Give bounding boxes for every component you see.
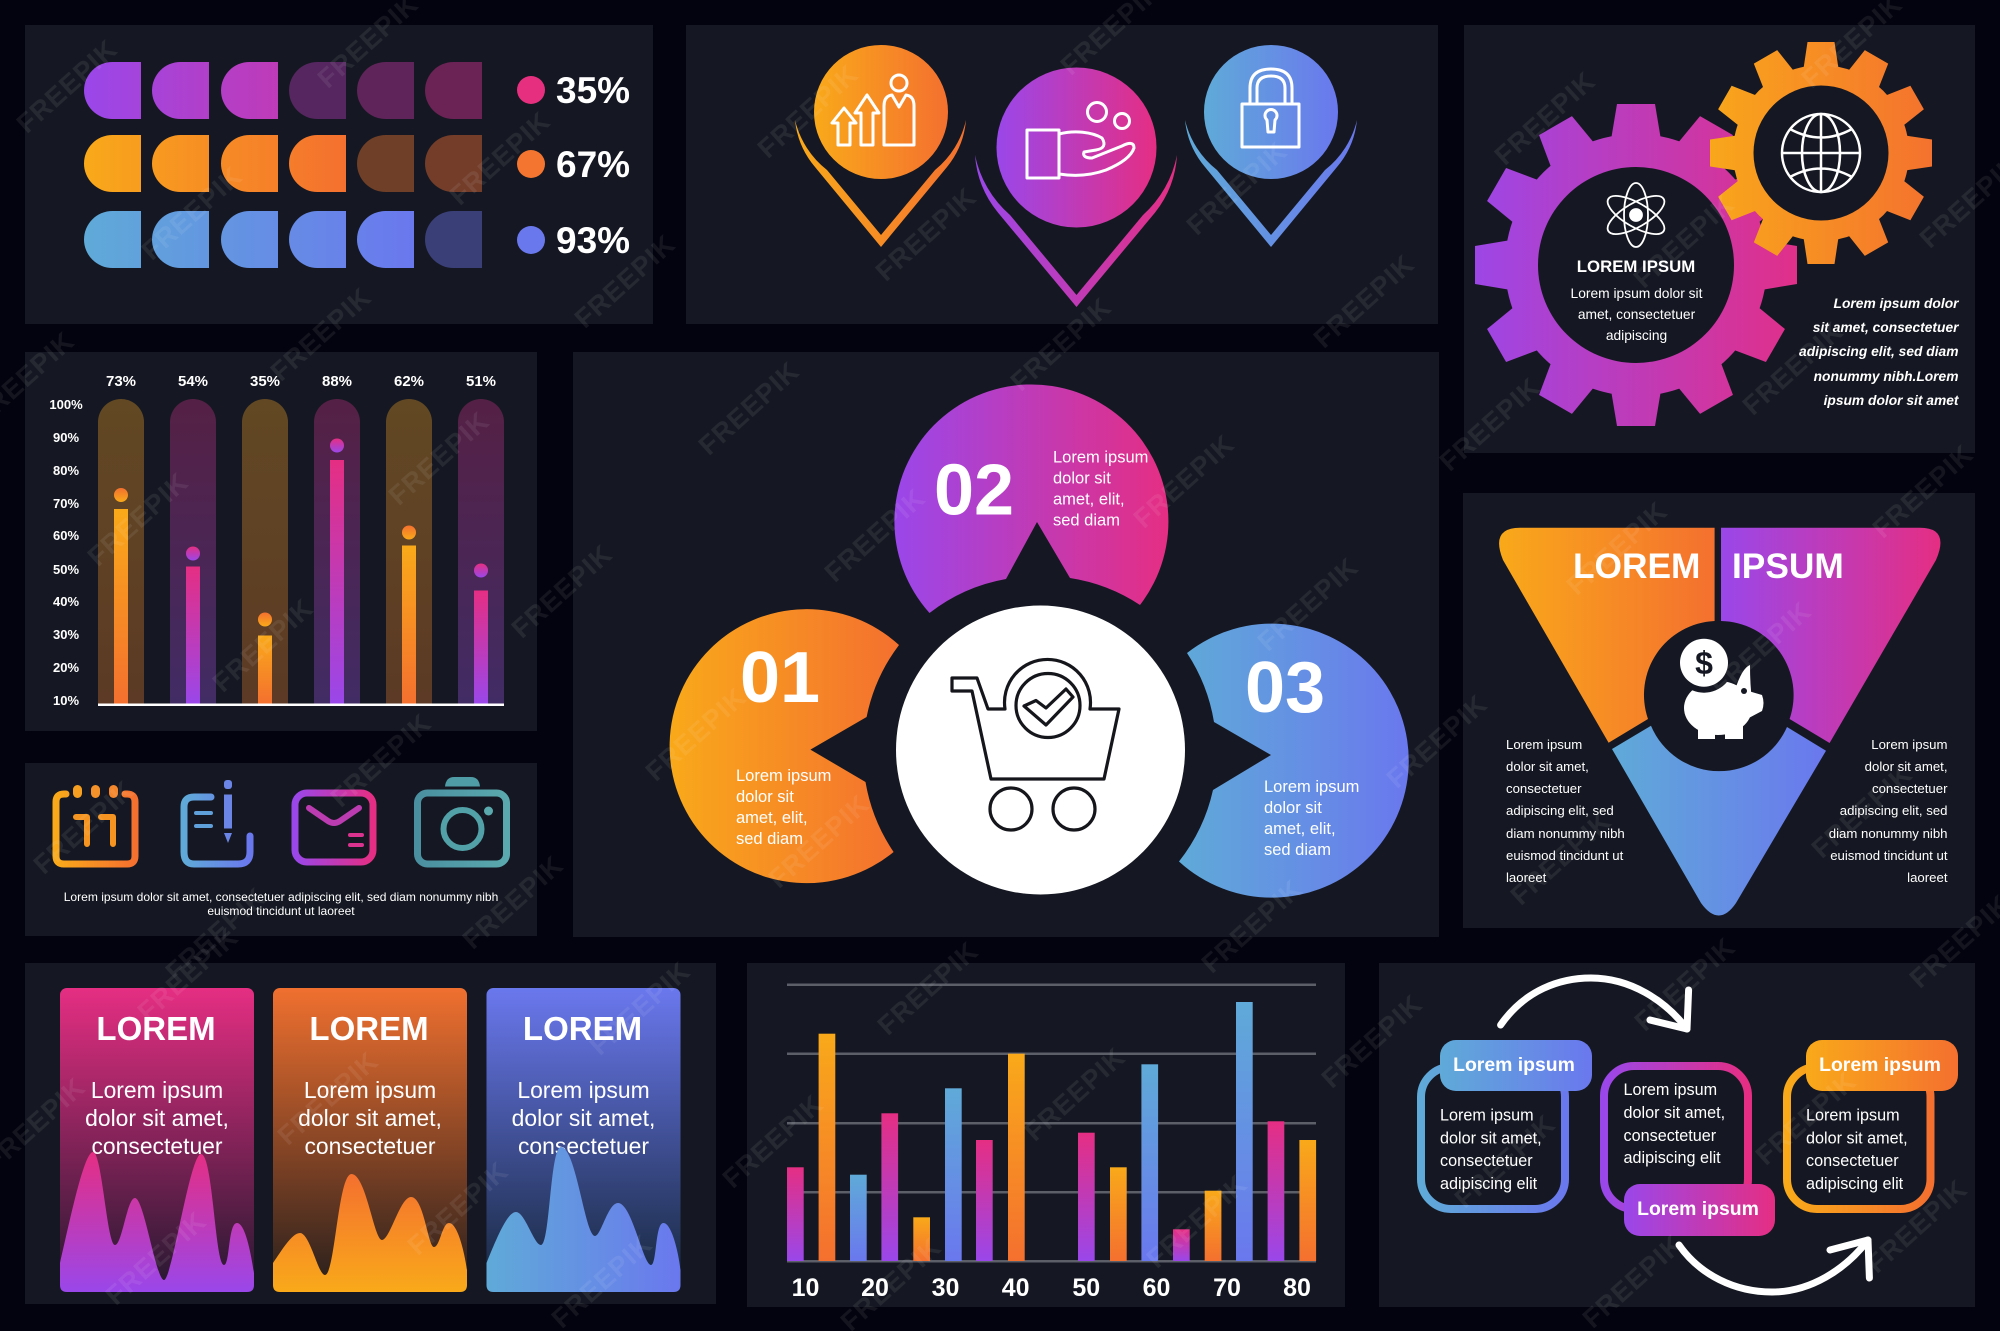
panel: location pins bbox=[686, 25, 1438, 324]
legend: percentages: 67% bbox=[556, 144, 630, 185]
text block: gear side note: ipsum dolor sit amet bbox=[1824, 393, 1960, 408]
text block: funnel right: adipiscing elit, sed bbox=[1840, 803, 1948, 818]
segment 01: 01 bbox=[740, 638, 820, 718]
watermarks: FREEPIK bbox=[265, 282, 377, 387]
panel: shopping cycle bbox=[573, 352, 1439, 937]
y axis labels: 20% bbox=[53, 660, 79, 675]
x axis labels: 20 bbox=[861, 1274, 889, 1302]
x axis labels: 80 bbox=[1283, 1274, 1311, 1302]
y axis labels: 10% bbox=[53, 693, 79, 708]
row of purple half-round shapes bbox=[84, 62, 482, 119]
segment 02: 02 bbox=[934, 450, 1014, 530]
text block: gear side note: nonummy nibh.Lorem bbox=[1814, 369, 1958, 384]
step 1: Lorem ipsum bbox=[1453, 1054, 1575, 1076]
watermarks: FREEPIK bbox=[870, 182, 982, 287]
segment 02 bbox=[894, 384, 1168, 613]
step 3: Lorem ipsum bbox=[1819, 1054, 1941, 1076]
text block: funnel right: diam nonummy nibh bbox=[1829, 826, 1948, 841]
segment 02: amet, elit, bbox=[1053, 490, 1125, 508]
legend: percentages: 35% bbox=[556, 70, 630, 111]
segment 03 bbox=[1179, 624, 1409, 898]
watermarks: FREEPIK bbox=[1308, 249, 1420, 354]
text block: funnel left: adipiscing elit, sed bbox=[1506, 803, 1614, 818]
x axis labels: 10 bbox=[792, 1274, 819, 1302]
text block: gear centre bbox=[1571, 286, 1703, 343]
y axis labels: 100% bbox=[49, 397, 83, 412]
step 2: consectetuer bbox=[1624, 1127, 1717, 1145]
watermarks: FREEPIK bbox=[1577, 1229, 1689, 1331]
watermarks: FREEPIK bbox=[1005, 292, 1117, 397]
step 3 bbox=[1787, 1040, 1958, 1209]
card: pink: LOREM bbox=[96, 1010, 216, 1047]
column: 62% bbox=[386, 399, 432, 704]
segment 03: amet, elit, bbox=[1264, 820, 1336, 838]
bars bbox=[787, 1002, 1316, 1261]
text block: funnel right: euismod tincidunt ut bbox=[1830, 848, 1948, 863]
legend: percentages bbox=[517, 70, 630, 261]
segment 01: Lorem ipsum bbox=[736, 767, 831, 785]
column labels bbox=[106, 373, 496, 390]
watermarks: FREEPIK bbox=[100, 1206, 212, 1311]
text block: gear side note bbox=[1799, 296, 1960, 408]
y axis labels: 50% bbox=[53, 562, 79, 577]
text block: gear centre: amet, consectetuer bbox=[1578, 307, 1696, 322]
funnel segment: purple bbox=[1721, 528, 1940, 743]
icon: envelope bbox=[295, 793, 373, 862]
watermarks: FREEPIK bbox=[1505, 806, 1617, 911]
pin: security bbox=[1185, 45, 1357, 247]
watermarks: FREEPIK bbox=[1181, 136, 1293, 241]
watermarks: FREEPIK bbox=[752, 59, 864, 164]
text block: funnel right bbox=[1829, 737, 1948, 885]
step 2: dolor sit amet, bbox=[1624, 1104, 1725, 1122]
y axis labels: 40% bbox=[53, 594, 79, 609]
watermarks: FREEPIK bbox=[1629, 932, 1741, 1037]
column labels: 62% bbox=[394, 373, 424, 390]
segment 03: Lorem ipsum bbox=[1264, 778, 1359, 796]
icon: piggy bank with coin: $ bbox=[1695, 645, 1713, 681]
panel: icon row bbox=[25, 763, 537, 936]
icon: hand with coins bbox=[1027, 102, 1134, 178]
watermarks: FREEPIK bbox=[160, 882, 272, 987]
segment 02: Lorem ipsum bbox=[1053, 448, 1148, 466]
card: pink: Lorem ipsum bbox=[91, 1077, 223, 1103]
watermarks: FREEPIK bbox=[872, 936, 984, 1041]
segment 03: 03 bbox=[1245, 648, 1325, 728]
baseline bbox=[98, 704, 504, 706]
icon: atom bbox=[1602, 183, 1670, 247]
y axis labels: 30% bbox=[53, 627, 79, 642]
segment 02: sed diam bbox=[1053, 512, 1120, 530]
segment 01: amet, elit, bbox=[736, 809, 808, 827]
heading: lorem: LOREM bbox=[1573, 547, 1700, 586]
legend: percentages: 93% bbox=[556, 220, 630, 261]
watermarks: FREEPIK bbox=[819, 483, 931, 588]
step 1: adipiscing elit bbox=[1440, 1175, 1538, 1193]
panel: percentage column chart bbox=[25, 352, 537, 731]
text block: funnel left: diam nonummy nibh bbox=[1506, 826, 1625, 841]
text block: funnel left bbox=[1506, 737, 1625, 885]
pin: growth bbox=[795, 45, 966, 247]
icon: padlock bbox=[1242, 69, 1299, 147]
watermarks: FREEPIK bbox=[1737, 316, 1849, 421]
card: blue: LOREM bbox=[523, 1010, 642, 1047]
watermarks: FREEPIK bbox=[325, 708, 437, 813]
text block: gear side note: Lorem ipsum dolor bbox=[1834, 296, 1959, 311]
card: blue: consectetuer bbox=[518, 1133, 649, 1159]
watermarks: FREEPIK bbox=[136, 161, 248, 266]
icon: arrows and person bbox=[832, 75, 914, 145]
step 3: Lorem ipsum bbox=[1806, 1106, 1900, 1124]
watermarks: FREEPIK bbox=[1806, 759, 1918, 864]
x axis labels: 40 bbox=[1002, 1274, 1030, 1302]
watermarks: FREEPIK bbox=[1141, 1169, 1253, 1274]
step 1: dolor sit amet, bbox=[1440, 1130, 1542, 1148]
watermarks: FREEPIK bbox=[1434, 372, 1546, 477]
arrow: bottom bbox=[1679, 1240, 1869, 1292]
column labels: 88% bbox=[322, 373, 352, 390]
icon: camera bbox=[418, 777, 506, 864]
gear: small orange bbox=[1710, 42, 1932, 264]
text block: gear centre: adipiscing bbox=[1606, 328, 1667, 343]
text block: funnel left: consectetuer bbox=[1506, 781, 1582, 796]
watermarks: FREEPIK bbox=[1489, 66, 1601, 171]
card: orange: Lorem ipsum bbox=[304, 1077, 436, 1103]
segment 03: sed diam bbox=[1264, 841, 1331, 859]
text block: gear side note: sit amet, consectetuer bbox=[1813, 320, 1959, 335]
text block: icon caption: Lorem ipsum dolor sit amet, consectetuer adipiscing elit, sed diam nonummy nibh bbox=[64, 890, 498, 904]
step 1: consectetuer bbox=[1440, 1152, 1533, 1170]
column: 88% bbox=[314, 399, 360, 704]
text block: gear side note: adipiscing elit, sed diam bbox=[1799, 344, 1958, 359]
row of blue half-round shapes bbox=[84, 211, 482, 268]
text block: funnel left: laoreet bbox=[1506, 870, 1547, 885]
icon: shopping cart bbox=[952, 659, 1119, 830]
segment 03: dolor sit bbox=[1264, 799, 1322, 817]
centre disc bbox=[896, 606, 1185, 894]
watermarks: FREEPIK bbox=[569, 229, 681, 334]
column: 51% bbox=[458, 399, 504, 704]
watermarks: FREEPIK bbox=[28, 775, 140, 880]
segment 01 bbox=[670, 609, 899, 883]
text block: gear centre: Lorem ipsum dolor sit bbox=[1571, 286, 1703, 301]
icon: globe bbox=[1782, 114, 1860, 192]
column labels: 35% bbox=[250, 373, 280, 390]
x axis labels: 60 bbox=[1143, 1274, 1170, 1302]
column: 54% bbox=[170, 399, 216, 704]
icon: piggy bank with coin bbox=[1674, 633, 1764, 739]
watermarks: FREEPIK bbox=[1628, 189, 1740, 294]
column: 35% bbox=[242, 399, 288, 704]
arrow: top bbox=[1501, 978, 1689, 1029]
panel: gears bbox=[1460, 25, 1975, 453]
watermarks: FREEPIK bbox=[11, 34, 123, 139]
watermarks: FREEPIK bbox=[640, 682, 752, 787]
card: orange: dolor sit amet, bbox=[298, 1105, 442, 1131]
step 2: adipiscing elit bbox=[1624, 1149, 1721, 1167]
column: 73% bbox=[98, 399, 144, 704]
segment 01: dolor sit bbox=[736, 788, 794, 806]
watermarks: FREEPIK bbox=[1128, 429, 1240, 534]
panel: bar chart bbox=[747, 963, 1345, 1307]
panel: process steps bbox=[1379, 963, 1975, 1307]
watermarks: FREEPIK bbox=[207, 593, 319, 698]
gear: large purple bbox=[1475, 104, 1797, 426]
row of orange half-round shapes bbox=[84, 135, 482, 192]
heading: lorem ipsum: LOREM IPSUM bbox=[1577, 257, 1695, 276]
watermarks: FREEPIK bbox=[1381, 689, 1493, 794]
y axis labels: 90% bbox=[53, 430, 79, 445]
panel: funnel bbox=[1463, 493, 1975, 928]
watermarks: FREEPIK bbox=[1019, 1042, 1131, 1147]
step 3: adipiscing elit bbox=[1806, 1175, 1904, 1193]
x axis labels: 50 bbox=[1072, 1274, 1100, 1302]
watermarks: FREEPIK bbox=[1750, 1066, 1862, 1171]
watermarks: FREEPIK bbox=[1561, 496, 1673, 601]
watermarks: FREEPIK bbox=[1316, 989, 1428, 1094]
text block: funnel right: Lorem ipsum bbox=[1871, 737, 1948, 752]
heading: ipsum: IPSUM bbox=[1732, 547, 1844, 586]
card: blue: dolor sit amet, bbox=[512, 1105, 655, 1131]
watermarks: FREEPIK bbox=[763, 789, 875, 894]
watermarks: FREEPIK bbox=[1867, 439, 1979, 544]
watermarks: FREEPIK bbox=[1705, 596, 1817, 701]
watermarks: FREEPIK bbox=[1252, 552, 1364, 657]
pin: giving hand bbox=[975, 68, 1177, 307]
funnel segment: orange bbox=[1499, 528, 1715, 743]
x axis labels bbox=[792, 1274, 1311, 1302]
y axis labels: 80% bbox=[53, 463, 79, 478]
y axis labels bbox=[49, 397, 83, 708]
segment 02: dolor sit bbox=[1053, 470, 1111, 488]
icon: calendar bbox=[56, 785, 135, 864]
text block: funnel left: dolor sit amet, bbox=[1506, 759, 1589, 774]
text block: funnel left: euismod tincidunt ut bbox=[1506, 848, 1624, 863]
card: pink bbox=[60, 988, 254, 1292]
watermarks: FREEPIK bbox=[546, 1229, 658, 1331]
watermarks: FREEPIK bbox=[82, 467, 194, 572]
watermarks: FREEPIK bbox=[506, 539, 618, 644]
card: pink: dolor sit amet, bbox=[85, 1105, 229, 1131]
watermarks: FREEPIK bbox=[272, 1046, 384, 1151]
funnel segment: blue bbox=[1612, 726, 1826, 916]
watermarks: FREEPIK bbox=[1861, 1174, 1973, 1279]
watermarks: FREEPIK bbox=[402, 1156, 514, 1261]
text block: funnel right: dolor sit amet, bbox=[1865, 759, 1948, 774]
step 3: consectetuer bbox=[1806, 1152, 1899, 1170]
watermarks: FREEPIK bbox=[383, 406, 495, 511]
x axis labels: 30 bbox=[932, 1274, 959, 1302]
watermarks: FREEPIK bbox=[693, 356, 805, 461]
card: orange: consectetuer bbox=[304, 1133, 436, 1159]
step 1 bbox=[1421, 1040, 1592, 1209]
card: pink: consectetuer bbox=[91, 1133, 223, 1159]
card: orange bbox=[273, 988, 467, 1292]
watermarks: FREEPIK bbox=[717, 1089, 829, 1194]
text block: icon caption bbox=[64, 890, 498, 918]
y axis labels: 60% bbox=[53, 528, 79, 543]
watermarks: FREEPIK bbox=[457, 850, 569, 955]
watermarks: FREEPIK bbox=[1196, 874, 1308, 979]
icon: document with pencil bbox=[184, 780, 250, 864]
step 3: dolor sit amet, bbox=[1806, 1130, 1908, 1148]
watermarks: FREEPIK bbox=[1449, 1109, 1561, 1214]
text block: funnel left: Lorem ipsum bbox=[1506, 737, 1582, 752]
card: orange: LOREM bbox=[309, 1010, 429, 1047]
text block: icon caption: euismod tincidunt ut laoreet bbox=[207, 904, 355, 918]
step 2: Lorem ipsum bbox=[1624, 1081, 1717, 1099]
column labels: 51% bbox=[466, 373, 496, 390]
step 2: Lorem ipsum bbox=[1637, 1198, 1759, 1220]
panel: area cards bbox=[25, 963, 716, 1304]
y axis labels: 70% bbox=[53, 496, 79, 511]
x axis labels: 70 bbox=[1213, 1274, 1241, 1302]
step 2 bbox=[1604, 1066, 1775, 1236]
text block: funnel right: consectetuer bbox=[1872, 781, 1948, 796]
text block: funnel right: laoreet bbox=[1907, 870, 1948, 885]
panel: percentage shape grid bbox=[25, 25, 653, 324]
column labels: 73% bbox=[106, 373, 136, 390]
card: blue bbox=[486, 988, 680, 1292]
watermarks: FREEPIK bbox=[584, 956, 696, 1061]
card: blue: Lorem ipsum bbox=[517, 1077, 650, 1103]
column labels: 54% bbox=[178, 373, 208, 390]
watermarks: FREEPIK bbox=[444, 106, 556, 211]
segment 01: sed diam bbox=[736, 830, 803, 848]
step 1: Lorem ipsum bbox=[1440, 1106, 1534, 1124]
watermarks: FREEPIK bbox=[132, 922, 244, 1027]
